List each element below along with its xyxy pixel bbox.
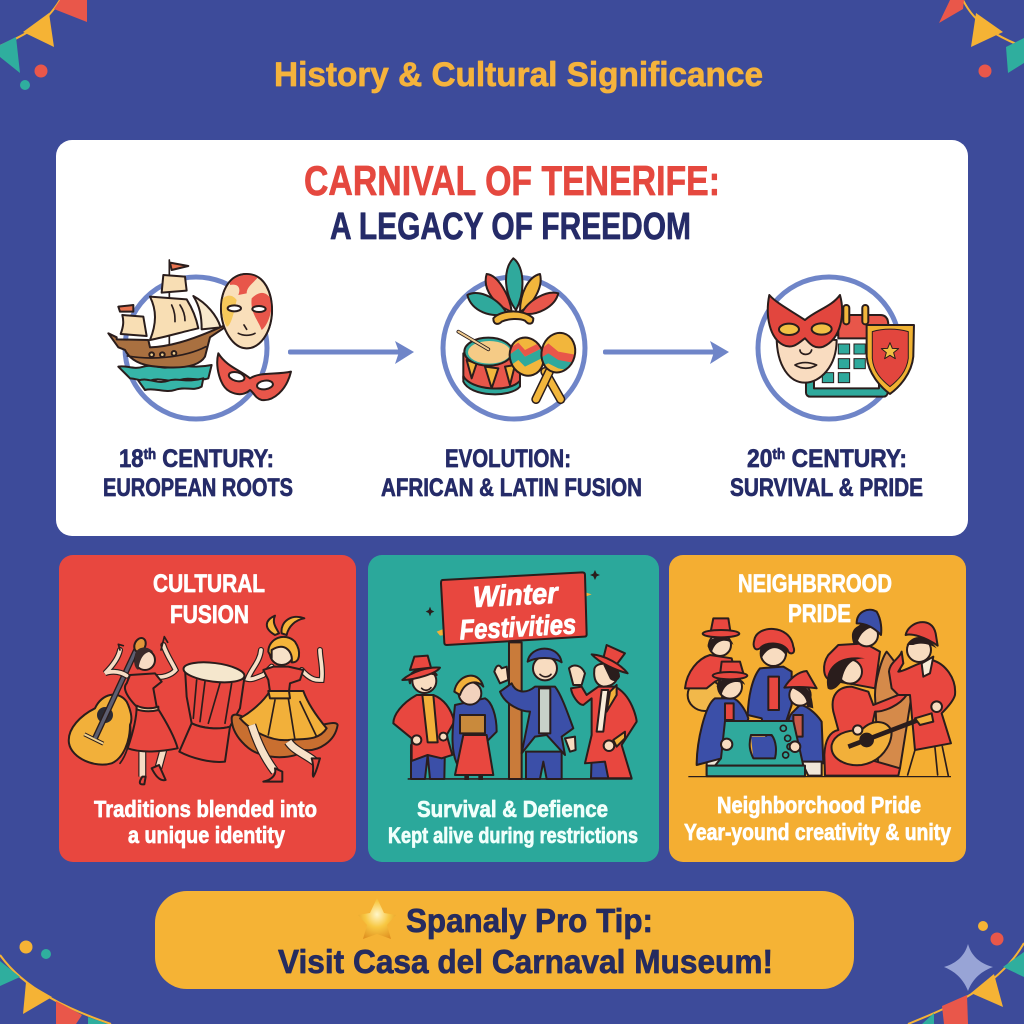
panel heading	[304, 157, 720, 248]
card text: Year-yound creativity & unity	[684, 819, 951, 845]
bunting: top right	[939, 0, 1024, 78]
seated woman with guitar	[824, 657, 933, 776]
card text: a unique identity	[128, 822, 285, 848]
tip text: Spanaly Pro Tip:	[406, 902, 653, 939]
tip text: Visit Casa del Carnaval Museum!	[278, 943, 773, 980]
sign board: Festivities	[459, 608, 577, 646]
card heading: FUSION	[170, 601, 249, 629]
card text	[94, 796, 317, 848]
illustration: sign and four revellers	[393, 570, 637, 780]
caption: 18th century	[103, 445, 293, 502]
card text: Neighborchood Pride	[717, 792, 921, 818]
caption: 18th century: th	[144, 446, 156, 463]
panel: neighborhood pride	[669, 555, 966, 862]
card heading	[738, 570, 892, 628]
card heading: NEIGHBRROOD	[738, 570, 892, 598]
caption: 20th century: CENTURY:	[785, 445, 907, 473]
title: History & Cultural Significance	[274, 56, 763, 94]
icon: ship and masks	[108, 260, 291, 419]
illustration: dancers, guitar and drum	[69, 616, 338, 784]
caption: 18th century: EUROPEAN ROOTS	[103, 474, 293, 502]
figure 1	[393, 656, 454, 779]
caption: 20th century: SURVIVAL & PRIDE	[730, 474, 923, 502]
upright bass	[875, 652, 912, 768]
caption: 18th century: 18	[119, 445, 147, 473]
sewing machine	[707, 721, 805, 776]
panel: cultural fusion	[59, 555, 356, 862]
card heading	[153, 570, 265, 629]
sign board	[426, 570, 600, 646]
panel heading: A LEGACY OF FREEDOM	[330, 206, 691, 248]
caption: evolution: EVOLUTION:	[445, 445, 571, 473]
callout: pro tip	[155, 891, 854, 989]
woman in blue hat	[824, 610, 881, 688]
caption: 20th century	[730, 445, 923, 502]
caption: evolution: AFRICAN & LATIN FUSION	[381, 474, 642, 502]
card text: Traditions blended into	[94, 796, 317, 822]
caption: evolution	[381, 445, 642, 502]
panel: timeline	[56, 140, 968, 536]
back-centre woman	[748, 629, 794, 758]
caption: 18th century: CENTURY:	[156, 445, 274, 473]
card heading: PRIDE	[788, 600, 851, 628]
card text	[684, 792, 951, 845]
back-left guitarist	[685, 618, 739, 711]
arrow 2	[603, 341, 729, 364]
card heading: CULTURAL	[153, 570, 265, 598]
panel heading: CARNIVAL OF TENERIFE:	[304, 157, 720, 204]
icon: drum, feathers and maracas	[443, 258, 585, 419]
panel: winter festivities	[368, 555, 659, 862]
sparkle	[944, 944, 993, 991]
card text: Survival & Defience	[417, 796, 608, 822]
icon: star	[358, 898, 396, 939]
figure 2	[452, 676, 497, 780]
card text: Kept alive during restrictions	[388, 823, 638, 848]
icon: mask, calendar and shield	[758, 277, 914, 419]
card text	[388, 796, 638, 848]
caption: 20th century: th	[772, 446, 785, 463]
woman with hat right	[889, 622, 955, 776]
arrow 1	[288, 341, 414, 364]
figure 3	[494, 649, 576, 779]
bunting: bottom right	[908, 921, 1024, 1024]
bunting: top left	[0, 0, 87, 90]
illustration: neighbours with sewing machine and guitar	[685, 610, 955, 777]
figure 4	[569, 645, 637, 778]
caption: 20th century: 20	[747, 445, 775, 473]
sign board: Winter	[472, 577, 560, 614]
front-left boy	[697, 662, 748, 775]
front-right girl	[784, 671, 823, 776]
sign post	[509, 642, 522, 779]
bunting: bottom left	[0, 940, 111, 1024]
tip text	[278, 902, 773, 980]
